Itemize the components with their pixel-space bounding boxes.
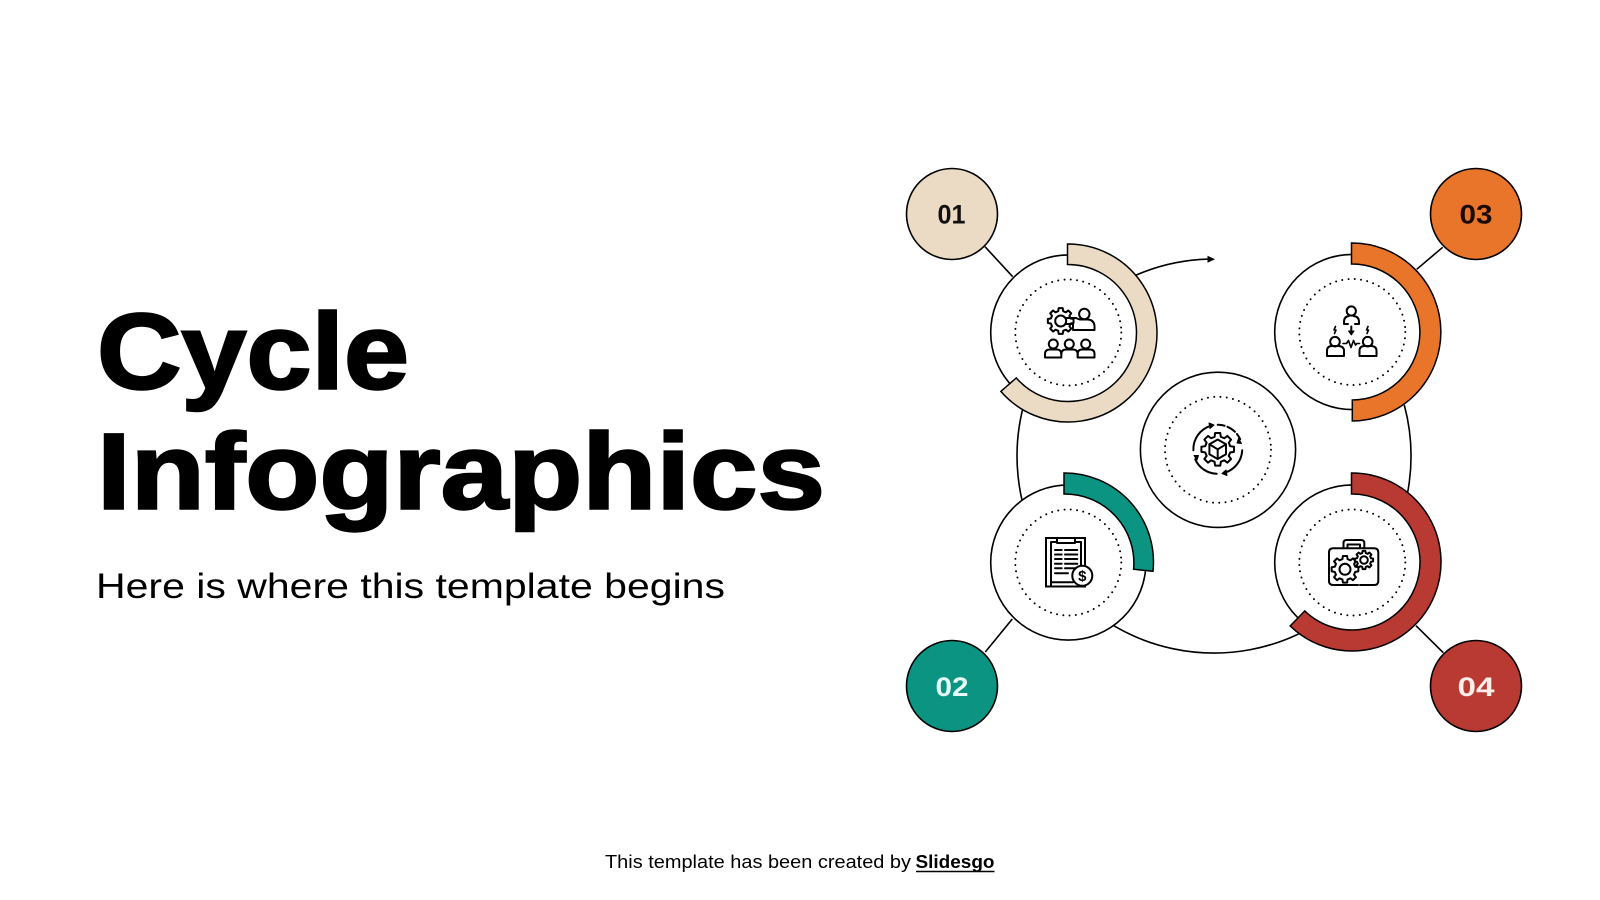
- title: Infographics: [97, 410, 825, 532]
- icon: clipboard with dollar coin: $: [1078, 568, 1087, 585]
- footer credit: Slidesgo: [916, 852, 995, 872]
- ring segment 04: [1290, 473, 1441, 651]
- node 04: [1275, 473, 1441, 651]
- badge 04: 04: [1458, 672, 1494, 702]
- node 02: [991, 473, 1153, 640]
- badge 01: 01: [938, 200, 966, 230]
- badge 02: 02: [936, 672, 968, 702]
- ring segment 01: [1001, 244, 1157, 422]
- connector: 03: [1417, 247, 1443, 269]
- icon: presenter with gear and audience: [1045, 308, 1094, 358]
- connector: 02: [985, 619, 1012, 652]
- badge 01: [906, 168, 998, 260]
- icon: gear with cube and cycle arrows: [1193, 423, 1242, 476]
- cycle arrow path: [1017, 256, 1411, 653]
- title: Cycle: [97, 290, 409, 412]
- node: center: [1140, 372, 1296, 527]
- icon: clipboard with dollar coin: [1046, 538, 1092, 586]
- title: [97, 290, 825, 532]
- node 01: [991, 244, 1157, 422]
- node 03: [1275, 243, 1441, 421]
- badge 03: [1430, 168, 1522, 260]
- badge 02: [906, 640, 998, 732]
- connector: 01: [985, 247, 1013, 277]
- subtitle: Here is where this template begins: [96, 567, 725, 606]
- badge 04: [1430, 640, 1522, 732]
- ring segment 02: [1064, 473, 1153, 571]
- ring segment 03: [1352, 243, 1441, 421]
- icon: toolbox with gears: [1329, 540, 1378, 585]
- connector: 04: [1416, 626, 1443, 653]
- icon: three people with tension: [1327, 306, 1376, 356]
- cycle diagram: [906, 168, 1522, 732]
- badge 03: 03: [1460, 200, 1492, 230]
- footer credit: This template has been created by: [605, 852, 911, 872]
